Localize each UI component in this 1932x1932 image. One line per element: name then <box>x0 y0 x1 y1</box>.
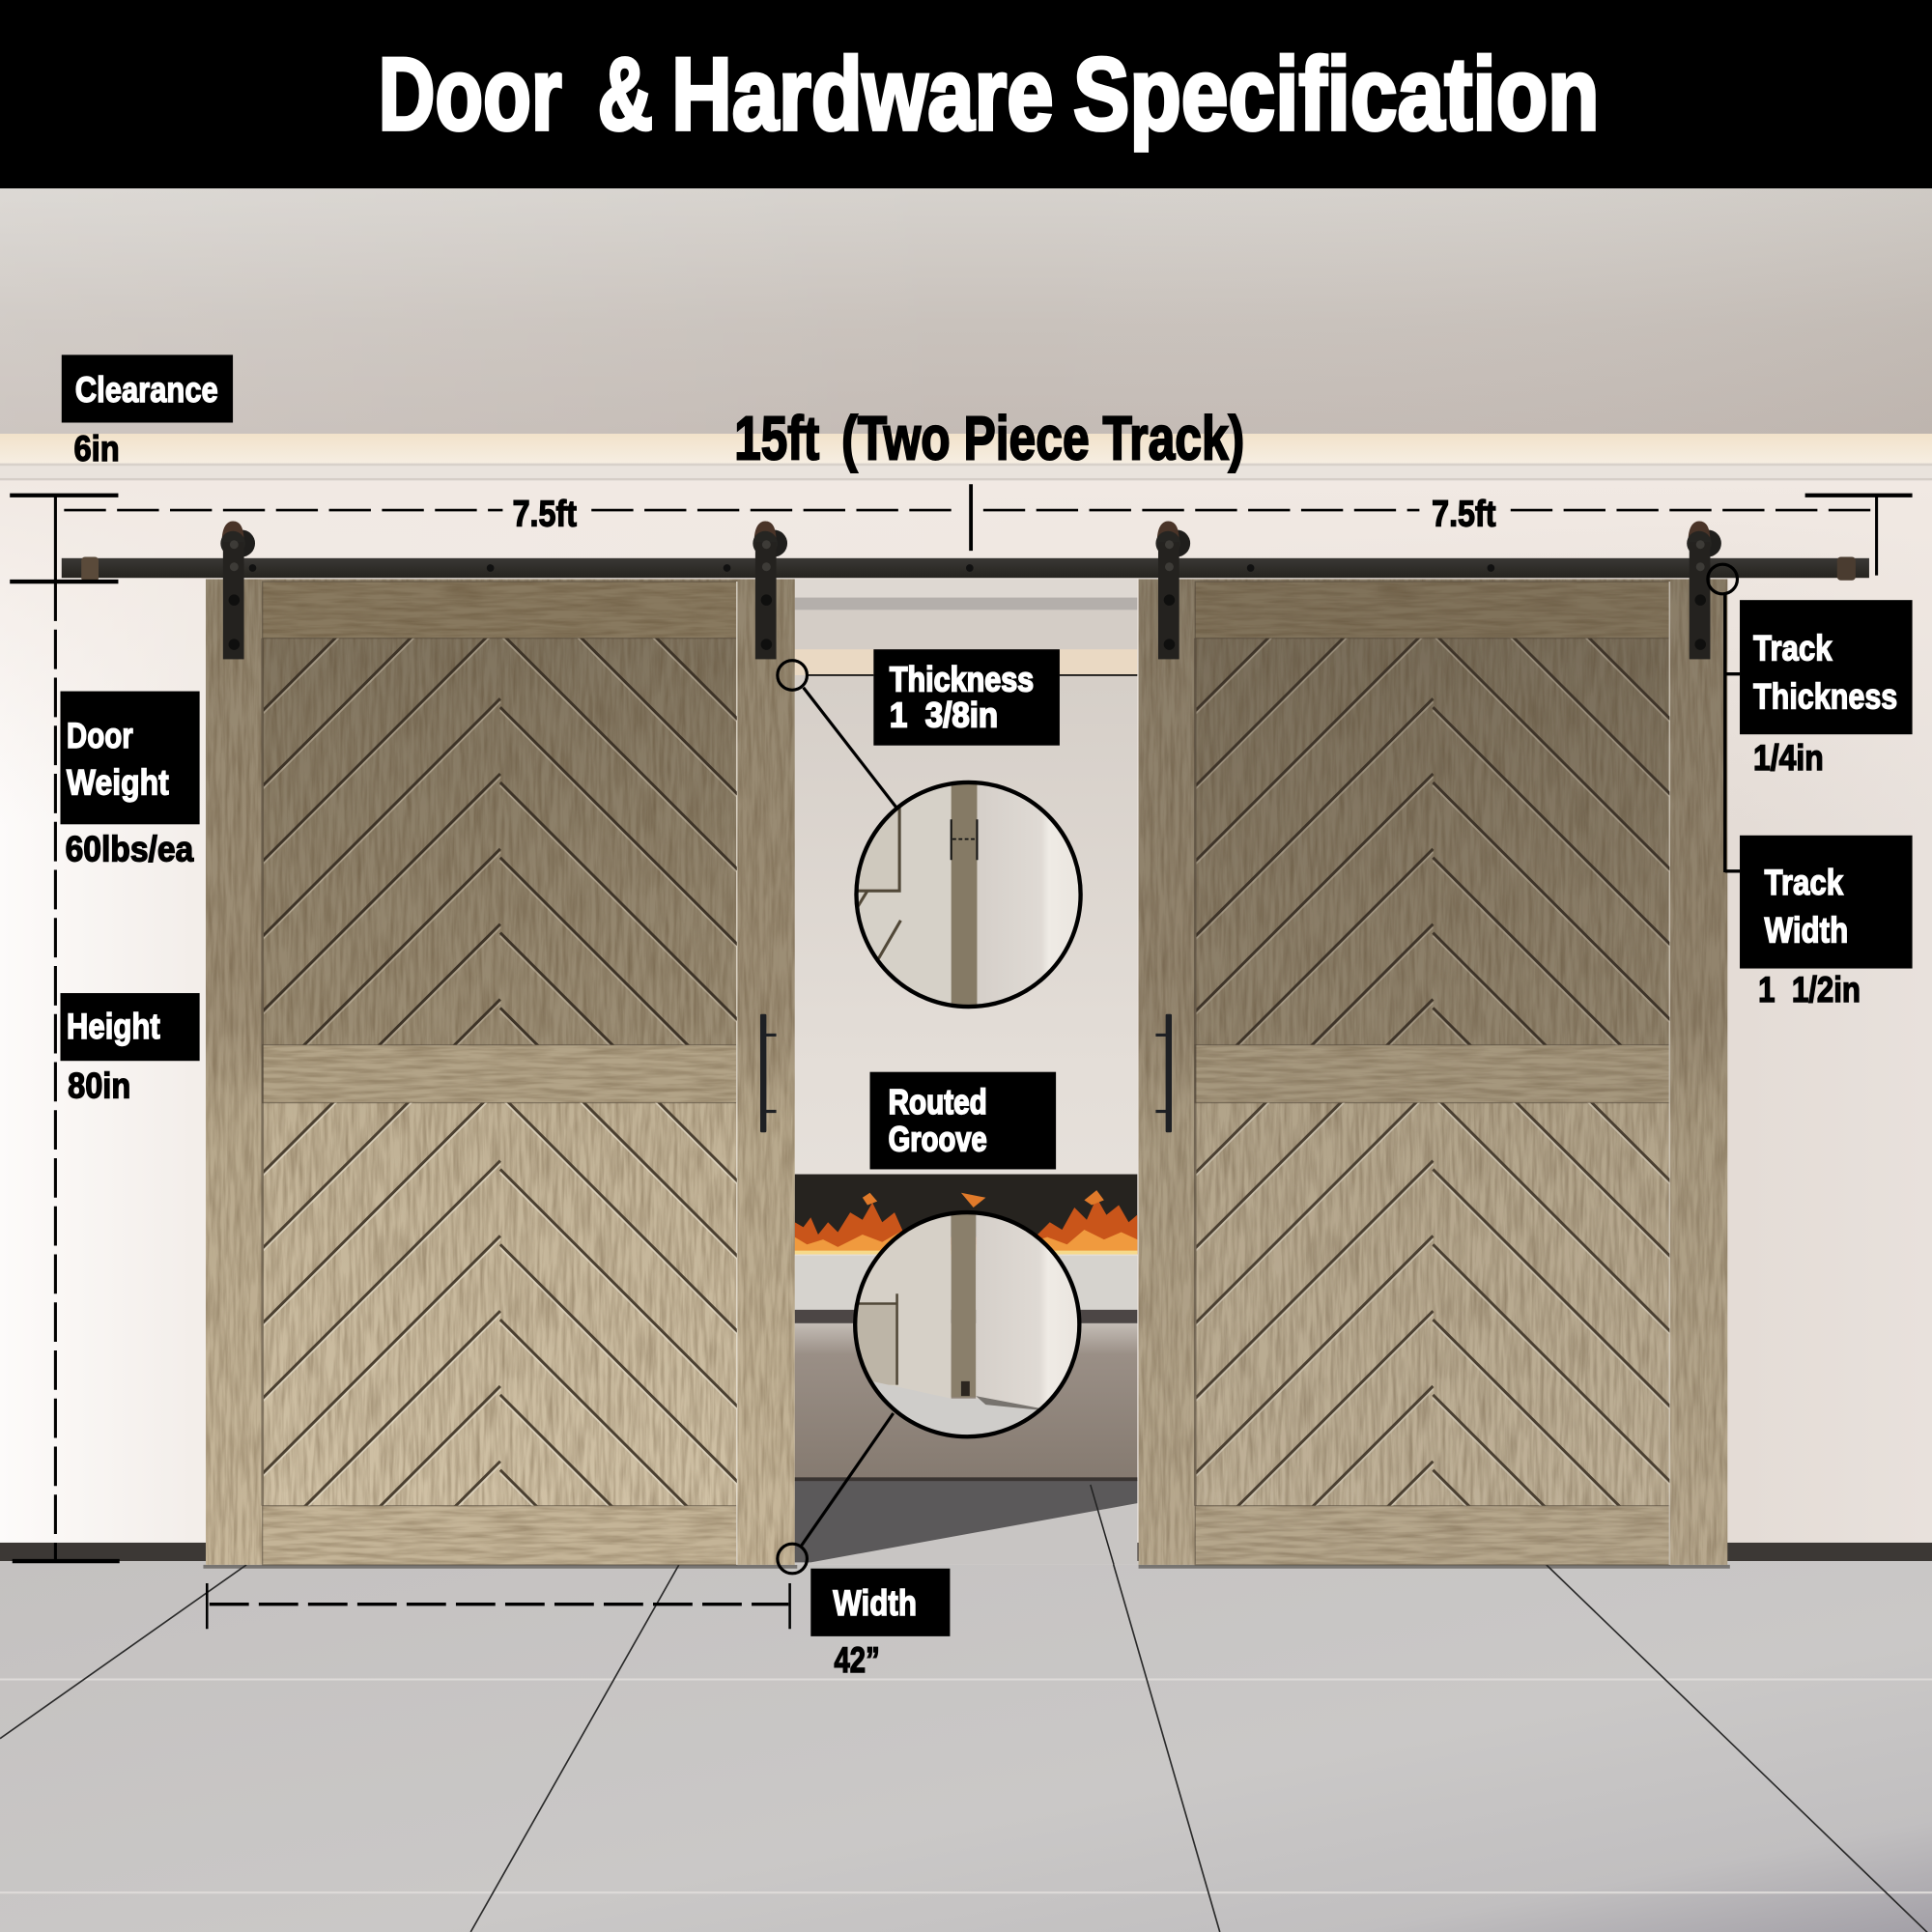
callout: width: Width <box>833 1583 917 1623</box>
magnifier: routed groove <box>855 1212 1082 1441</box>
callout: track width: Width <box>1765 911 1848 951</box>
barn door track <box>62 557 1869 582</box>
header band <box>0 0 1932 188</box>
callout: thickness: 1 3/8in <box>890 696 998 735</box>
right door <box>1139 473 1727 1719</box>
title: Door <box>379 36 562 152</box>
left door <box>206 473 795 1719</box>
callout: height: 80in <box>68 1065 130 1105</box>
hanger: right door left <box>1155 522 1190 659</box>
dimension: 15ft track <box>10 404 1913 1561</box>
hanger: left door right <box>753 522 787 659</box>
hanger: left door left <box>220 522 255 659</box>
dimension: 15ft track: (Two Piece Track) <box>841 404 1244 473</box>
callout: width: 42” <box>835 1640 880 1680</box>
callout: height: Height <box>67 1007 160 1046</box>
callout: door weight: Weight <box>67 763 169 803</box>
title: & <box>598 36 653 152</box>
callout: height <box>60 993 200 1105</box>
magnifier: door thickness <box>855 781 1083 1008</box>
dimension: 15ft track: 15ft <box>734 404 819 473</box>
callout: track width: 1 1/2in <box>1758 970 1861 1009</box>
title: Hardware <box>671 36 1054 152</box>
label: left 7.5ft: 7.5ft <box>513 494 577 535</box>
callout: routed groove: Routed <box>889 1083 987 1122</box>
title <box>379 36 1600 152</box>
callout: thickness: Thickness <box>890 661 1034 699</box>
opening between doors <box>795 579 1137 1565</box>
callout: track width <box>1740 836 1913 1009</box>
callout: clearance <box>62 355 233 469</box>
callout: clearance: Clearance <box>75 370 218 410</box>
callout: door weight: Door <box>67 716 133 755</box>
callout: track thickness <box>1740 600 1913 778</box>
label: right 7.5ft: 7.5ft <box>1432 494 1496 535</box>
door handle <box>760 1014 777 1132</box>
callout lines and markers <box>778 564 1740 1574</box>
callout: door weight <box>60 692 200 869</box>
title: Specification <box>1073 36 1600 152</box>
callout: track thickness: Track <box>1753 629 1833 668</box>
callout: clearance: 6in <box>74 429 120 469</box>
callout: thickness <box>873 649 1060 746</box>
thickness marker <box>952 819 977 860</box>
left end stop <box>81 557 99 582</box>
hanger: right door right <box>1687 522 1721 659</box>
callout: width <box>810 1569 950 1680</box>
callout: routed groove: Groove <box>889 1120 987 1158</box>
callout: track thickness: 1/4in <box>1753 738 1824 778</box>
floor tile joints <box>0 1485 1932 1932</box>
right end stop <box>1837 557 1856 581</box>
dimension: door width <box>207 1583 790 1629</box>
callout: track width: Track <box>1765 863 1844 902</box>
door handle <box>1155 1014 1172 1132</box>
callout: door weight: 60lbs/ea <box>66 830 194 869</box>
callout: routed groove <box>870 1072 1056 1169</box>
callout: track thickness: Thickness <box>1753 676 1897 716</box>
